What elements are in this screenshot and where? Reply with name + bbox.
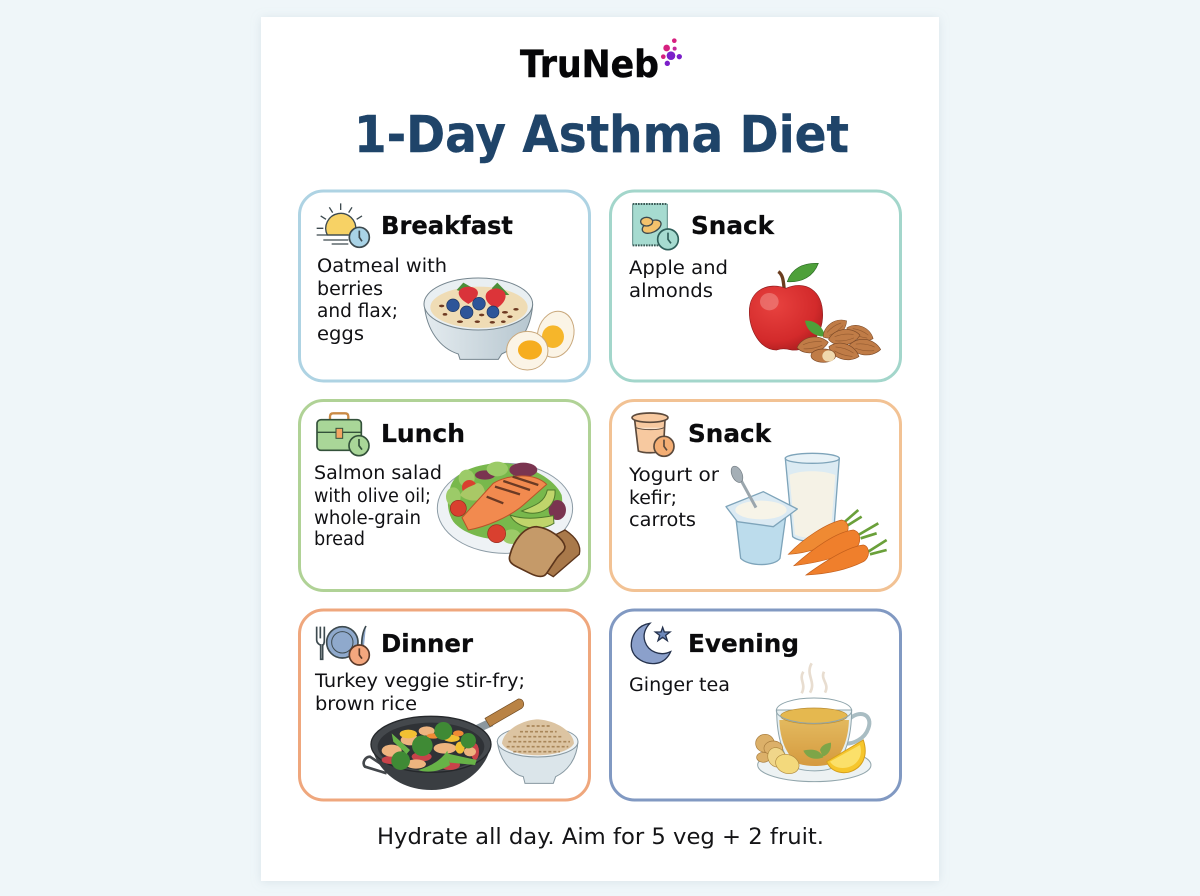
heading: Breakfast	[381, 211, 513, 240]
panel: afternoon snack	[610, 400, 900, 590]
illustration: oatmeal bowl and eggs	[424, 278, 579, 370]
icon: lunch bag with clock	[317, 413, 369, 456]
meal text: carrots	[629, 510, 696, 531]
meal text: Apple and	[629, 258, 728, 279]
meal text: kefir;	[629, 488, 677, 509]
panel: morning snack	[610, 191, 900, 381]
meal text: whole-grain	[314, 508, 421, 529]
panel: dinner	[300, 610, 590, 800]
heading: Evening	[688, 629, 799, 658]
heading: Dinner	[381, 629, 474, 658]
icon: yogurt cup with clock	[632, 413, 674, 456]
illustration: apple and almonds	[749, 263, 882, 364]
icon: sunrise with clock	[317, 203, 369, 247]
TruNeb logo: TruNeb	[520, 43, 659, 86]
footer note: Hydrate all day. Aim for 5 veg + 2 fruit.	[377, 825, 824, 850]
heading: Lunch	[381, 419, 465, 448]
meal text: brown rice	[315, 694, 417, 715]
meal text	[628, 465, 719, 531]
meal text: berries	[317, 279, 383, 300]
icon: snack bag with clock	[633, 203, 678, 250]
meal text: with olive oil;	[314, 486, 431, 507]
title: 1-Day Asthma Diet	[354, 106, 849, 165]
meal text: Turkey veggie stir-fry;	[314, 671, 525, 692]
meal text: Salmon salad	[314, 463, 442, 484]
meal text: Yogurt or	[628, 465, 719, 486]
panel: lunch	[300, 400, 590, 590]
white page panel	[261, 17, 939, 881]
icon: moon and star	[631, 623, 671, 664]
meal text: and flax;	[317, 301, 398, 322]
illustration: salmon salad and bread	[437, 462, 580, 577]
meal text	[314, 463, 442, 550]
panel: evening	[610, 610, 900, 800]
illustration: wok and brown rice	[364, 699, 578, 790]
panel: breakfast	[300, 191, 590, 381]
meal text	[629, 258, 728, 302]
meal text: bread	[314, 529, 365, 550]
illustration: yogurt, kefir and carrots	[726, 453, 887, 575]
meal text	[314, 671, 525, 715]
illustration: ginger tea with lemon	[756, 663, 871, 782]
heading: Snack	[691, 211, 775, 240]
meal text: almonds	[629, 281, 713, 302]
meal text: eggs	[317, 324, 364, 345]
heading: Snack	[688, 419, 772, 448]
meal text: Oatmeal with	[317, 256, 447, 277]
icon: plate, cutlery and clock	[317, 626, 369, 665]
meal text	[317, 256, 447, 345]
meal text: Ginger tea	[629, 675, 730, 696]
